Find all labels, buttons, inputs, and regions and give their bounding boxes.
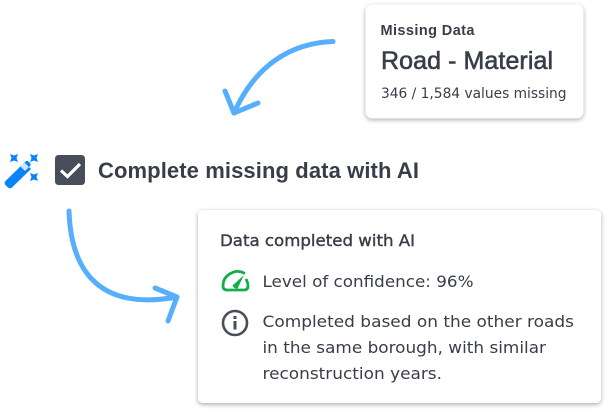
icon: info [223,311,247,335]
explanation text: reconstruction years. [262,364,442,383]
icon: checked checkbox [55,155,85,185]
bottom arrow [69,211,177,321]
icon: magic wand [5,154,38,188]
confidence text: Level of confidence: 96% [262,272,474,291]
missing data label: Missing Data [380,23,475,39]
road material heading: Road - Material [381,47,553,75]
heading: complete missing data: Complete missing data with AI [98,158,419,183]
explanation text: Completed based on the other roads [262,312,574,331]
explanation text: in the same borough, with similar [262,338,546,357]
icon: confidence gauge [223,271,248,290]
values missing count: 346 / 1,584 values missing [381,86,566,102]
panel: data completed [198,210,601,403]
explanation text [262,312,574,383]
card title: Data completed with AI [220,231,415,250]
panel: missing data [366,4,584,118]
top arrow [225,42,333,113]
